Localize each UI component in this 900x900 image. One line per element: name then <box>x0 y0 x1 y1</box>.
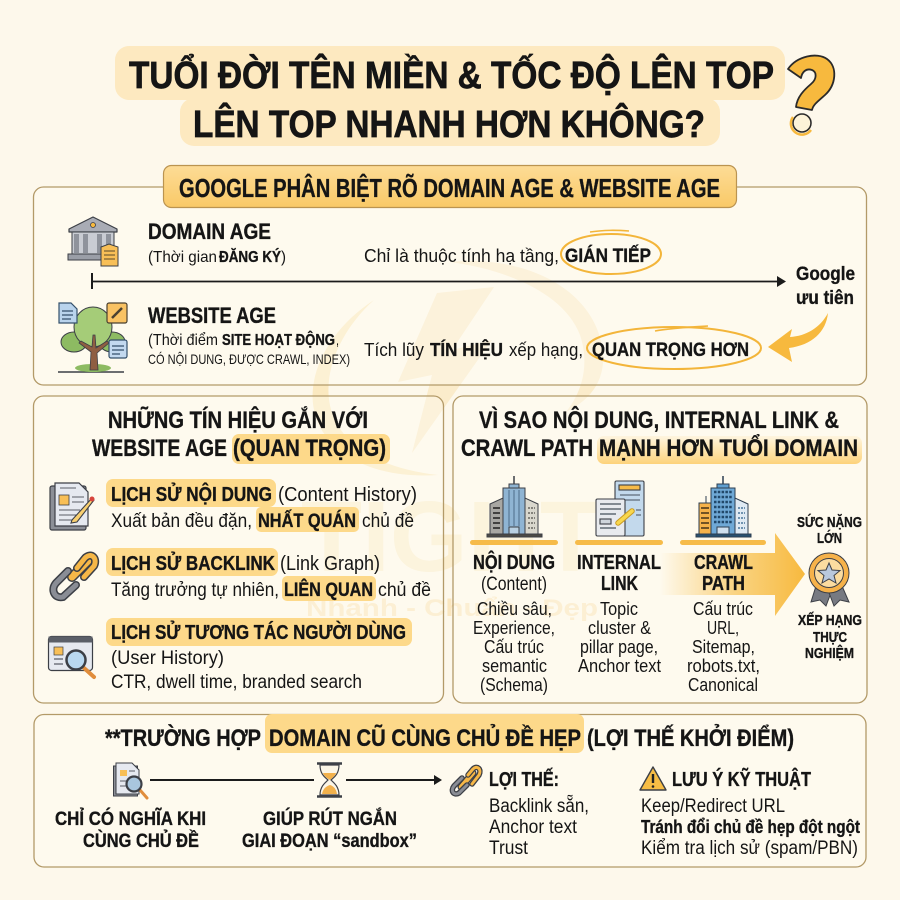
panel heading: WEBSITE AGE <box>92 435 227 462</box>
step: shorten sandbox: GIAI ĐOẠN “sandbox” <box>242 830 417 852</box>
content column: NỘI DUNG <box>473 550 555 574</box>
benefits list: Trust <box>489 838 529 859</box>
website age label: (Thời điểm <box>148 331 218 349</box>
connector arrow two <box>346 775 442 785</box>
timeline arrow <box>92 273 786 289</box>
signal: content history: (Content History) <box>278 484 417 506</box>
technical notes list: LƯU Ý KỸ THUẬT <box>672 767 811 791</box>
website age label: SITE HOẠT ĐỘNG <box>222 330 335 349</box>
domain age statement <box>364 230 661 274</box>
internal link column: INTERNAL <box>577 552 661 574</box>
panel heading: **TRƯỜNG HỢP <box>105 724 261 752</box>
connector arrow one <box>150 779 314 781</box>
benefits list: Backlink sẵn, <box>489 796 589 817</box>
icon: medal <box>809 553 849 606</box>
practical ranking label <box>798 612 862 662</box>
icon: bank building with document <box>68 217 118 266</box>
title: TUỔI ĐỜI TÊN MIỀN & TỐC ĐỘ LÊN TOP <box>129 52 774 97</box>
google priority label: Google <box>796 263 855 285</box>
section heading tab: GOOGLE PHÂN BIỆT RÕ DOMAIN AGE & WEBSITE AGE <box>179 173 720 203</box>
panel heading <box>92 406 390 464</box>
panel heading: (QUAN TRỌNG) <box>233 435 386 462</box>
icon: documents with link <box>596 481 644 536</box>
content column: Chiều sâu, <box>477 599 552 619</box>
signal: backlink history: Tăng trưởng tự nhiên, <box>111 580 279 601</box>
signal: user interaction history: LỊCH SỬ TƯƠNG TÁC NGƯỜI DÙNG <box>111 620 406 644</box>
domain age label: ĐĂNG KÝ <box>219 247 281 266</box>
crawl path column: Cấu trúc <box>693 599 753 619</box>
icon: browser and magnifier <box>48 636 94 677</box>
signal: backlink history: LỊCH SỬ BACKLINK <box>111 551 275 575</box>
step: same topic: CHỈ CÓ NGHĨA KHI <box>55 806 206 830</box>
website age statement: TÍN HIỆU <box>430 339 503 360</box>
internal link column: cluster & <box>588 618 651 638</box>
signal: backlink history: LIÊN QUAN <box>284 579 373 601</box>
panel: domain age vs website age <box>34 166 866 385</box>
domain age label: DOMAIN AGE <box>148 219 271 244</box>
practical ranking label: XẾP HẠNG <box>798 612 862 629</box>
technical notes list: Tránh đổi chủ đề hẹp đột ngột <box>641 817 860 837</box>
icon: office building <box>487 476 542 537</box>
crawl path column: Sitemap, <box>692 637 755 657</box>
heavy weight label <box>797 513 862 547</box>
website age statement: xếp hạng, <box>509 339 583 360</box>
heavy weight label: LỚN <box>817 529 842 547</box>
step: shorten sandbox <box>242 806 417 852</box>
icon: small chain link <box>452 767 480 794</box>
internal link column <box>577 552 661 676</box>
practical ranking label: NGHIỆM <box>805 644 854 662</box>
step: same topic <box>55 806 206 852</box>
crawl path column: Canonical <box>688 675 758 695</box>
panel heading <box>105 714 794 753</box>
technical notes list: Kiểm tra lịch sử (spam/PBN) <box>641 838 858 859</box>
section heading tab <box>164 166 736 208</box>
domain age label: (Thời gian <box>148 249 217 266</box>
website age statement: QUAN TRỌNG HƠN <box>592 340 749 361</box>
signal: content history: Xuất bản đều đặn, <box>111 511 252 532</box>
website age label: CÓ NỘI DUNG, ĐƯỢC CRAWL, INDEX) <box>148 351 350 367</box>
crawl path column: robots.txt, <box>687 656 760 676</box>
panel: old domain with same narrow topic <box>34 714 866 867</box>
signal: content history: NHẤT QUÁN <box>258 510 356 532</box>
panel: why content, internal link and crawl path beat domain age <box>453 396 867 703</box>
signal: user interaction history: (User History) <box>111 647 224 669</box>
content column: semantic <box>482 656 547 676</box>
panel heading <box>461 406 862 464</box>
step: shorten sandbox: GIÚP RÚT NGẮN <box>263 806 397 830</box>
benefits list: LỢI THẾ: <box>489 768 559 791</box>
icon: blue tower <box>696 476 751 537</box>
bar: crawl path <box>680 540 766 545</box>
panel heading: NHỮNG TÍN HIỆU GẮN VỚI <box>108 406 368 434</box>
icon: curved arrow <box>768 313 828 362</box>
signal: content history: LỊCH SỬ NỘI DUNG <box>111 482 272 506</box>
website age statement: Tích lũy <box>364 339 425 360</box>
website age label <box>148 303 350 367</box>
technical notes list: Keep/Redirect URL <box>641 796 785 817</box>
internal link column: pillar page, <box>580 637 658 657</box>
domain age label <box>148 219 286 266</box>
icon: document and pencil <box>50 483 94 530</box>
icon: warning triangle <box>640 767 666 790</box>
watermark logo: TIGHT <box>301 481 601 593</box>
crawl path column: CRAWL <box>694 552 753 574</box>
google priority label: ưu tiên <box>796 287 854 309</box>
internal link column: Topic <box>600 599 638 619</box>
title: LÊN TOP NHANH HƠN KHÔNG? <box>193 101 705 146</box>
practical ranking label: THỰC <box>813 630 847 646</box>
bar: internal link <box>575 540 663 545</box>
panel: signals tied to website age <box>34 396 444 703</box>
panel heading: VÌ SAO NỘI DUNG, INTERNAL LINK & <box>479 406 839 434</box>
icon: question mark <box>788 56 834 135</box>
signal: content history <box>106 479 417 532</box>
crawl path column: PATH <box>702 573 745 595</box>
watermark logo <box>301 261 603 622</box>
signal: user interaction history: CTR, dwell time, branded search <box>111 672 362 693</box>
icon: document with magnifier <box>114 763 147 798</box>
domain age statement: GIÁN TIẾP <box>565 245 651 267</box>
big arrow <box>660 533 805 616</box>
technical notes list <box>641 767 860 859</box>
icon: chain link <box>53 556 95 597</box>
signal: content history: chủ đề <box>362 511 414 532</box>
website age statement <box>364 326 761 369</box>
content column: (Content) <box>481 574 547 595</box>
content column: (Schema) <box>480 675 548 695</box>
website age label: WEBSITE AGE <box>148 303 276 328</box>
crawl path column: URL, <box>707 618 739 638</box>
content column: Cấu trúc <box>484 637 544 657</box>
content column <box>473 550 555 695</box>
panel heading: DOMAIN CŨ CÙNG CHỦ ĐỀ HẸP <box>269 723 581 752</box>
internal link column: LINK <box>601 573 638 595</box>
domain age label: ) <box>281 249 286 266</box>
title <box>115 46 785 146</box>
bar: content <box>470 540 558 545</box>
panel heading: CRAWL PATH <box>461 435 593 462</box>
panel heading: MẠNH HƠN TUỔI DOMAIN <box>599 434 858 462</box>
website age label: , <box>336 332 339 349</box>
watermark logo: Nhanh - Chuẩn - Đẹp <box>306 595 598 622</box>
signal: backlink history: chủ đề <box>378 580 431 601</box>
icon: tree with documents <box>58 303 127 372</box>
domain age statement: Chỉ là thuộc tính hạ tầng, <box>364 245 559 266</box>
signal: backlink history: (Link Graph) <box>280 553 380 575</box>
benefits list: Anchor text <box>489 817 578 838</box>
benefits list <box>489 768 589 859</box>
crawl path column <box>687 552 760 695</box>
icon: hourglass <box>317 764 342 796</box>
signal: user interaction history <box>106 618 412 693</box>
step: same topic: CÙNG CHỦ ĐỀ <box>83 828 199 852</box>
internal link column: Anchor text <box>578 656 661 676</box>
panel heading: (LỢI THẾ KHỞI ĐIỂM) <box>587 723 794 752</box>
heavy weight label: SỨC NẶNG <box>797 513 862 531</box>
signal: backlink history <box>106 548 431 601</box>
google priority label <box>796 263 855 309</box>
content column: Experience, <box>473 618 555 638</box>
